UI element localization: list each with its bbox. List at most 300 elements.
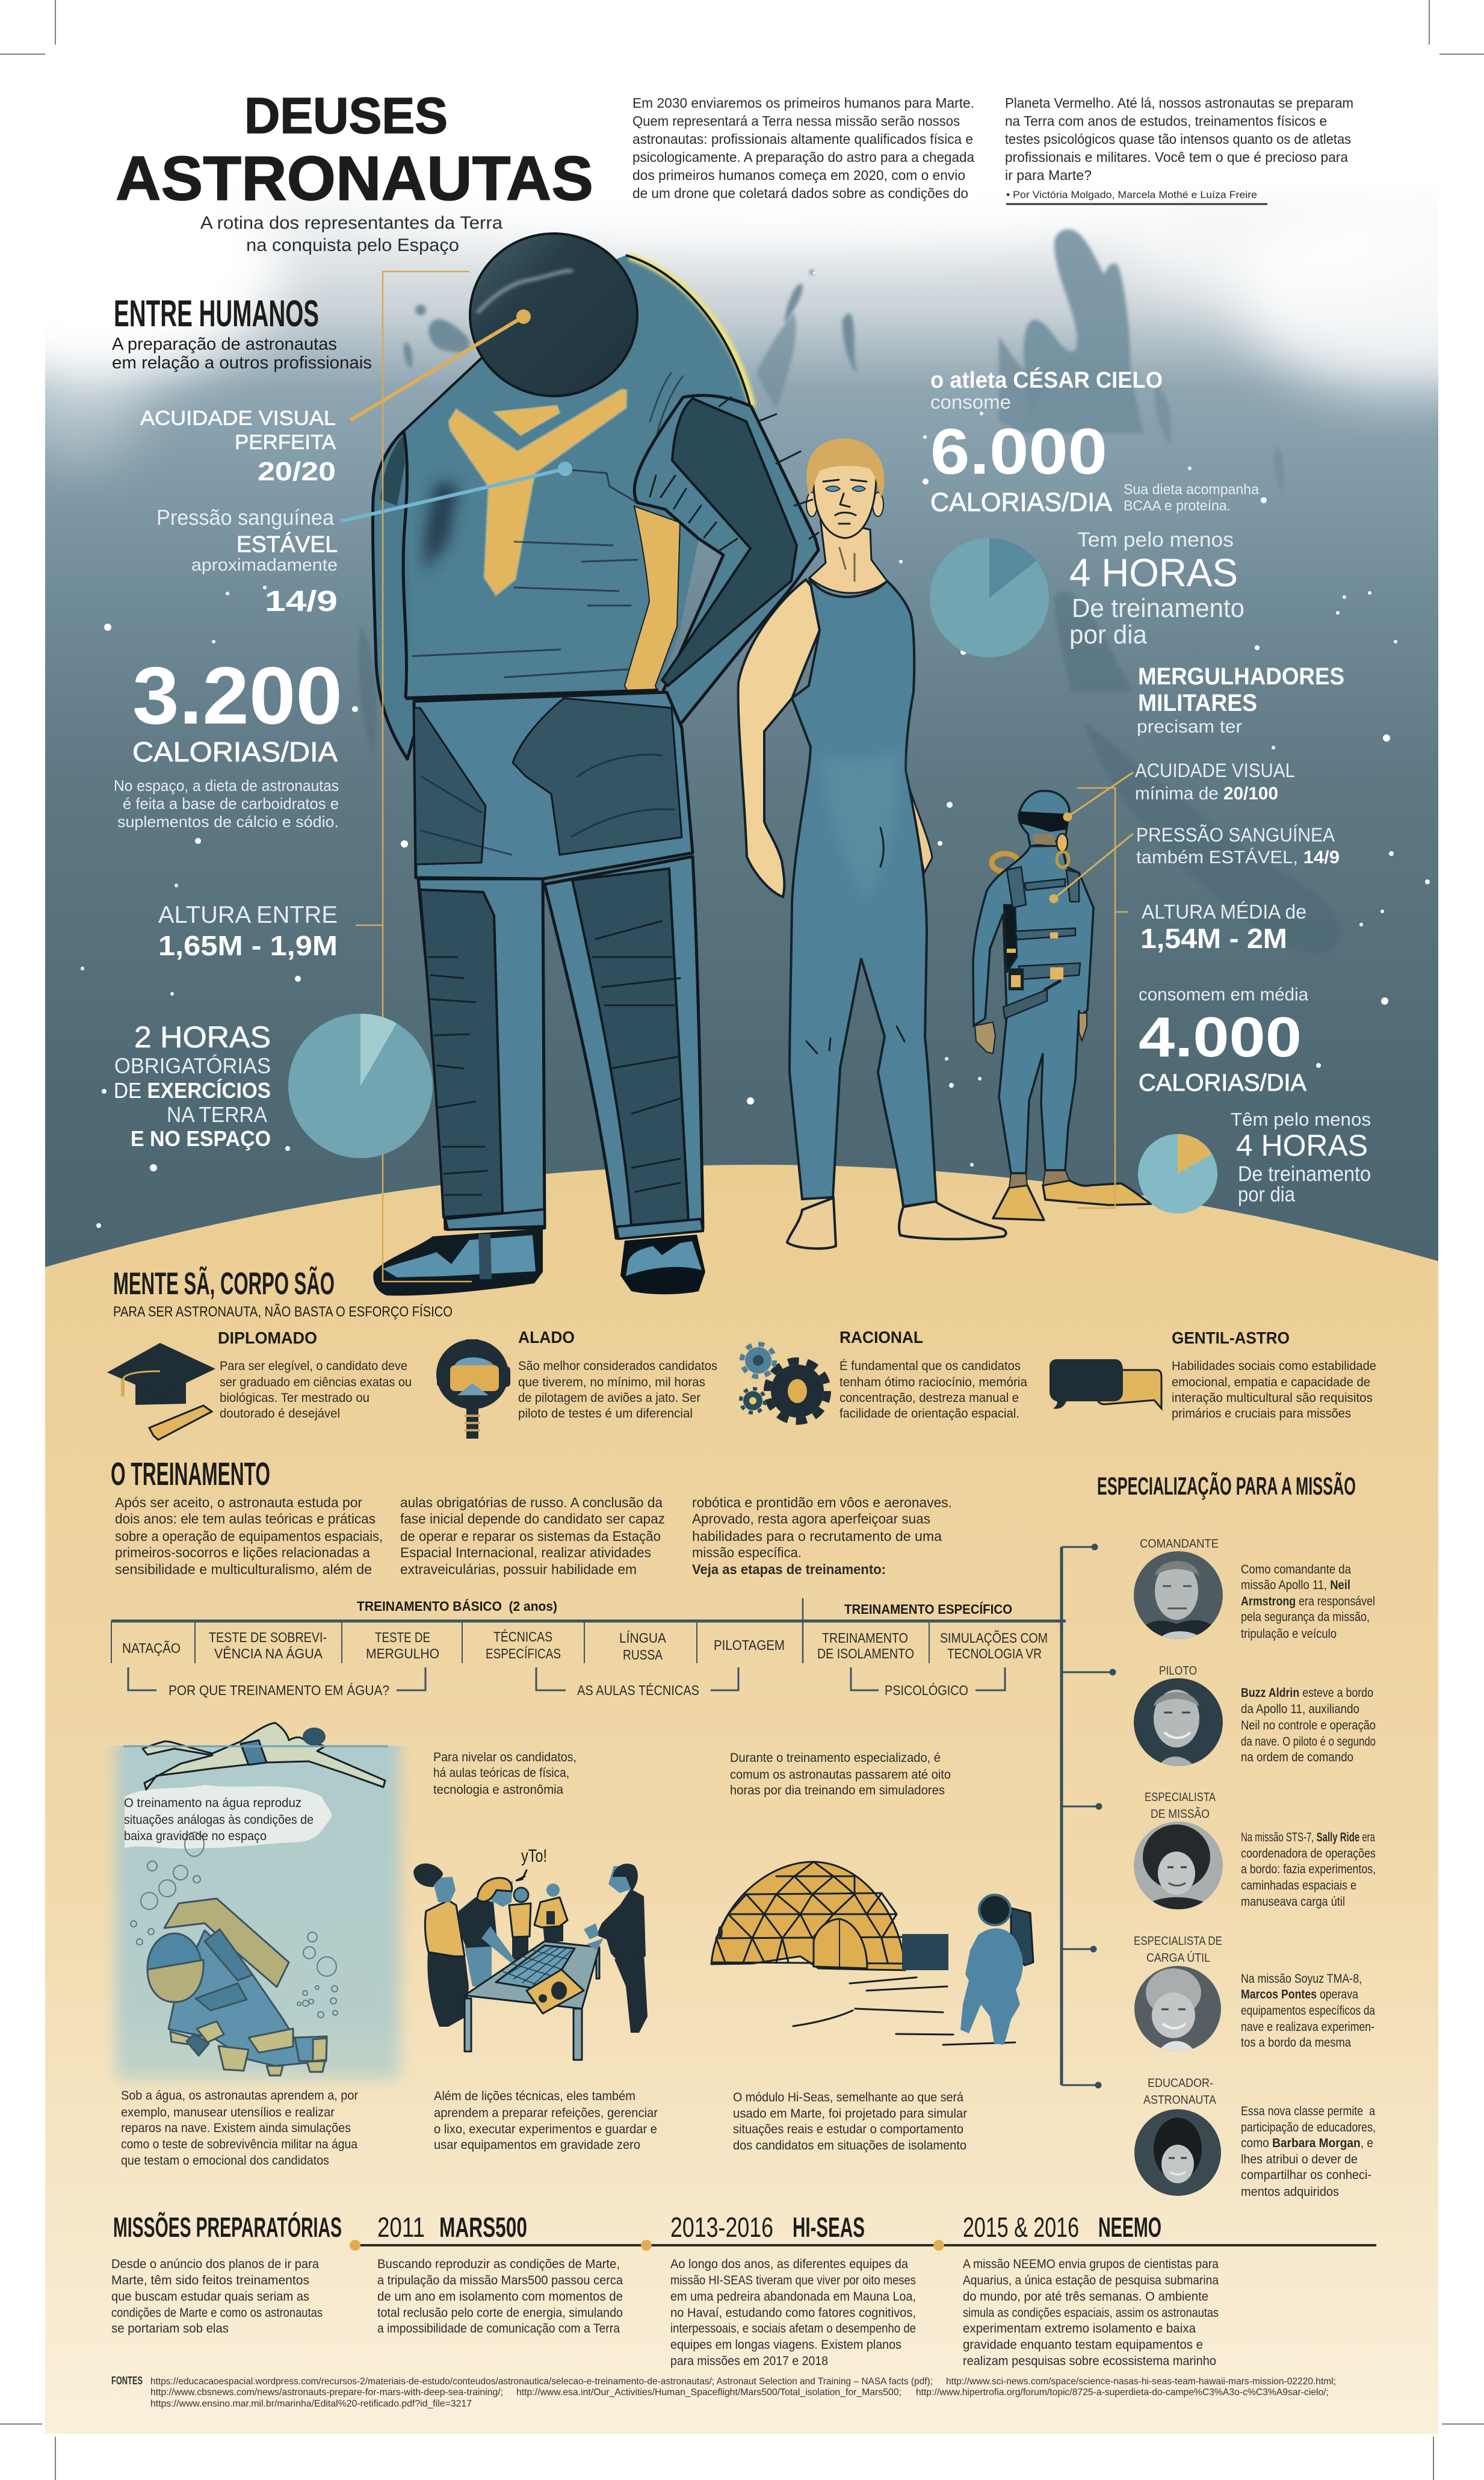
bios: Armstrong era responsável xyxy=(1241,1595,1375,1608)
near arm xyxy=(738,580,820,897)
bios: Neil no controle e operação xyxy=(1241,1719,1376,1732)
sources: http://www.esa.int/Our_Activities/Human_Spaceflight/Mars500/Total_isolation_for_Mars500; xyxy=(516,2387,901,2398)
stat: astronaut height: 1,65M - 1,9M xyxy=(158,930,338,961)
heading: missões preparatórias: MISSÕES PREPARATÓRIAS xyxy=(113,2212,342,2243)
illustration: Hi-Seas dome xyxy=(711,1862,1015,2045)
text: training intro: dois anos: ele tem aulas teóricas e práticas xyxy=(115,1511,376,1527)
bios: Marcos Pontes operava xyxy=(1241,1988,1358,2001)
text: bottom captions: Sob a água, os astronautas aprendem a, por xyxy=(121,2089,358,2103)
intro text xyxy=(632,95,1353,201)
block: racional: concentração, destreza manual e xyxy=(839,1391,1019,1405)
intro text: Planeta Vermelho. Até lá, nossos astronautas se preparam xyxy=(1005,95,1353,111)
sources: http://www.hipertrofia.org/forum/topic/8725-a-superdieta-do-campe%C3%A3o-c%C3%A9sar-cielo/; xyxy=(916,2387,1329,2398)
stat: divers: consomem em média xyxy=(1139,985,1308,1005)
stat: astronaut calories: é feita a base de carboidratos e xyxy=(123,795,339,813)
block: racional: facilidade de orientação espacial. xyxy=(839,1407,1019,1421)
block: diplomado: DIPLOMADO xyxy=(218,1328,317,1347)
stat: blood pressure: 14/9 xyxy=(265,586,338,618)
stat: blood pressure: aproximadamente xyxy=(191,556,338,575)
text: missions: a impossibilidade de comunicação com a Terra xyxy=(377,2322,620,2336)
title: DEUSES xyxy=(244,87,448,144)
bios: da Apollo 11, auxiliando xyxy=(1241,1702,1359,1716)
woman left xyxy=(413,1864,469,2027)
block: racional xyxy=(839,1328,1027,1421)
block: alado: São melhor considerados candidatos xyxy=(518,1359,717,1373)
byline: • Por Victória Molgado, Marcela Mothé e Luíza Freire xyxy=(1006,189,1257,200)
stat: divers: ACUIDADE VISUAL xyxy=(1135,760,1295,781)
illustration: Hi-Seas astronaut xyxy=(960,1895,1033,2045)
stat: divers: MERGULHADORES xyxy=(1138,663,1344,690)
heading: o treinamento: O TREINAMENTO xyxy=(111,1456,270,1492)
block: diplomado: biológicas. Ter mestrado ou xyxy=(220,1391,369,1405)
coil xyxy=(992,854,1018,872)
left leg xyxy=(418,879,545,1230)
text: training intro: de operar e reparar os sistemas da Estação xyxy=(400,1528,661,1544)
stat: divers: por dia xyxy=(1238,1183,1295,1206)
text: missions: que buscam estudar quais seriam as xyxy=(111,2290,309,2304)
timeline xyxy=(350,2240,1376,2251)
text: missions: experimentam extremo isolamento e baixa xyxy=(963,2322,1196,2336)
text: bottom captions: o lixo, executar experimentos e guardar e xyxy=(434,2122,657,2136)
text: training intro: missão específica. xyxy=(692,1545,802,1560)
stat: astronaut calories: suplementos de cálcio e sódio. xyxy=(117,813,339,831)
heading: entre humanos: A preparação de astronautas xyxy=(112,335,337,354)
text: training intro: sobre a operação de equipamentos espaciais, xyxy=(115,1528,383,1544)
heading: missões preparatórias: NEEMO xyxy=(1098,2212,1161,2243)
heading: mente sã, corpo são xyxy=(113,1266,453,1320)
illustration: classroom: yTo! xyxy=(521,1846,547,1866)
block: diplomado: doutorado é desejável xyxy=(220,1407,340,1421)
title: ASTRONAUTAS xyxy=(116,144,593,214)
intro text: Quem representará a Terra nessa missão serão nossos xyxy=(632,113,960,129)
heading: mente sã, corpo são: PARA SER ASTRONAUTA, NÃO BASTA O ESFORÇO FÍSICO xyxy=(113,1304,453,1320)
boots xyxy=(373,1229,705,1296)
stat: exercise hours: 2 HORAS xyxy=(134,1020,271,1054)
text: missions: total reclusão pelo corte de energia, simulando xyxy=(377,2306,623,2320)
text: bottom captions: usado em Marte, foi projetado para simular xyxy=(733,2107,967,2121)
sources: https://www.ensino.mar.mil.br/marinha/Edital%20-retificado.pdf?id_file=3217 xyxy=(150,2399,472,2409)
role labels: PILOTO xyxy=(1159,1664,1197,1678)
text: missions: Aquarius, a única estação de pesquisa submarina xyxy=(963,2274,1219,2287)
stat: divers: Têm pelo menos xyxy=(1231,1109,1371,1130)
text: training intro xyxy=(115,1495,952,1577)
heading: missões preparatórias: MARS500 xyxy=(439,2212,527,2243)
bios: Como comandante da xyxy=(1241,1563,1351,1576)
text: water training caption: situações análogas às condições de xyxy=(124,1813,314,1827)
text: bottom captions xyxy=(121,2089,967,2168)
text: missions: gravidade enquanto testam equipamentos e xyxy=(963,2338,1203,2352)
text: bottom captions: usar equipamentos em gravidade zero xyxy=(434,2138,640,2152)
text: water training caption xyxy=(124,1796,314,1843)
role labels: DE MISSÃO xyxy=(1151,1806,1210,1821)
role labels: CARGA ÚTIL xyxy=(1146,1951,1210,1965)
stat: exercise hours: DE EXERCÍCIOS xyxy=(114,1078,271,1103)
intro text: psicologicamente. A preparação do astro para a chegada xyxy=(632,149,974,165)
table xyxy=(465,1941,599,2060)
wrinkles xyxy=(413,470,637,677)
heading: missões preparatórias: HI-SEAS xyxy=(793,2212,865,2243)
sources xyxy=(111,2375,1336,2409)
role labels: ASTRONAUTA xyxy=(1143,2094,1217,2107)
bios: lhes atribui o dever de xyxy=(1241,2153,1358,2166)
stat: athlete: CALORIAS/DIA xyxy=(930,488,1113,517)
pelvis xyxy=(406,690,693,879)
bios: participação de educadores, xyxy=(1241,2121,1376,2134)
bios: coordenadora de operações xyxy=(1241,1847,1376,1861)
text: bottom captions: exemplo, manusear utensílios e realizar xyxy=(121,2106,335,2119)
heading: missões preparatórias: 2015 & 2016 xyxy=(963,2212,1079,2243)
smudge xyxy=(424,482,459,572)
sources: https://educacaoespacial.wordpress.com/recursos-2/materiais-de-estudo/conteudos/astronautica/selecao-e-treinamento-de-astronautas/; Astronaut Selection and Training – NASA facts (pdf); xyxy=(150,2376,933,2387)
bubbles xyxy=(131,1832,338,2018)
text: missions: para missões em 2017 e 2018 xyxy=(670,2354,828,2368)
intro text: de um drone que coletará dados sobre as condições do xyxy=(632,185,968,201)
title xyxy=(116,87,593,214)
stat: exercise hours: OBRIGATÓRIAS xyxy=(114,1053,271,1078)
text: missions: Buscando reproduzir as condições de Marte, xyxy=(377,2257,620,2271)
sources: FONTES xyxy=(111,2375,143,2387)
panel: sand ground xyxy=(45,1165,1438,2434)
training table xyxy=(111,1598,1066,1663)
training table: VÊNCIA NA ÁGUA xyxy=(214,1646,323,1661)
man right xyxy=(584,1864,648,2033)
intro text: dos primeiros humanos começa em 2020, com o envio xyxy=(632,167,965,183)
training table: TREINAMENTO BÁSICO (2 anos) xyxy=(357,1599,557,1614)
heading: missões preparatórias: 2013-2016 xyxy=(670,2212,773,2243)
arrow: visual acuity xyxy=(350,309,531,420)
portrait: Neil Armstrong xyxy=(1131,1550,1228,1640)
block: gentil-astro: primários e cruciais para missões xyxy=(1172,1407,1351,1421)
stat: divers xyxy=(1135,663,1371,1206)
text: bottom captions: que testam o emocional dos candidatos xyxy=(121,2154,329,2168)
stat: blood pressure: ESTÁVEL xyxy=(237,532,338,557)
text: water training caption: baixa gravidade no espaço xyxy=(124,1829,267,1843)
text: missions: Desde o anúncio dos planos de ir para xyxy=(111,2257,319,2271)
stat: athlete training: por dia xyxy=(1069,620,1147,649)
diver body xyxy=(973,846,1093,1173)
subtitle xyxy=(200,213,502,255)
portrait: Buzz Aldrin xyxy=(1131,1676,1228,1767)
portrait: Marcos Pontes xyxy=(1134,1966,1221,2051)
stat: divers: ALTURA MÉDIA de xyxy=(1142,901,1306,923)
bios: pela segurança da missão, xyxy=(1241,1610,1370,1624)
feet xyxy=(787,1198,836,1248)
icon: swimmer xyxy=(143,1723,385,1790)
training table: RUSSA xyxy=(623,1647,663,1663)
stat: divers: mínima de 20/100 xyxy=(1135,784,1278,804)
text: simulators caption: horas por dia treinando em simuladores xyxy=(730,1784,945,1797)
role labels: ESPECIALISTA xyxy=(1145,1791,1216,1804)
bios: missão Apollo 11, Neil xyxy=(1241,1578,1350,1592)
neck xyxy=(809,518,887,593)
text: bottom captions: como o teste de sobrevivência militar na água xyxy=(121,2137,357,2151)
intro text: astronautas: profissionais altamente qualificados física e xyxy=(632,131,973,147)
text: simulators caption: Durante o treinamento especializado, é xyxy=(730,1751,941,1765)
icon: gears xyxy=(741,1344,827,1421)
text: bottom captions: Além de lições técnicas, eles também xyxy=(434,2089,635,2103)
blonde person xyxy=(459,1878,522,1986)
icon: underwater astronaut xyxy=(147,1899,327,2075)
torso xyxy=(404,358,699,698)
block: diplomado: ser graduado em ciências exatas ou xyxy=(220,1375,412,1389)
illustration: athlete xyxy=(738,438,1006,1248)
bios: Na missão Soyuz TMA-8, xyxy=(1241,1972,1362,1986)
intro text: testes psicológicos quase tão intensos quanto os de atletas xyxy=(1005,131,1351,147)
intro text: na Terra com anos de estudos, treinamentos físicos e xyxy=(1005,113,1327,129)
training table: SIMULAÇÕES COM xyxy=(940,1629,1048,1646)
role labels: EDUCADOR- xyxy=(1148,2077,1213,2090)
training table: NATAÇÃO xyxy=(122,1640,181,1656)
block: racional: É fundamental que os candidatos xyxy=(839,1359,1021,1373)
text: missions: missão HI-SEAS tiveram que viver por oito meses xyxy=(670,2274,916,2287)
text: bottom captions: aprendem a preparar refeições, gerenciar xyxy=(434,2106,658,2120)
portrait: Sally Ride xyxy=(1131,1821,1228,1911)
text: simulators caption: comum os astronautas passarem até oito xyxy=(730,1768,951,1782)
tree connector xyxy=(1062,1544,1116,2088)
text: bottom captions: dos candidatos em situações de isolamento xyxy=(733,2139,966,2153)
text: simulators caption xyxy=(730,1751,951,1797)
icon: speech bubbles xyxy=(1050,1359,1161,1409)
training table: TESTE DE xyxy=(375,1629,430,1645)
block: diplomado xyxy=(218,1328,412,1421)
heading: entre humanos: em relação a outros profissionais xyxy=(112,353,372,373)
text: training intro: fase inicial depende do candidato ser capaz xyxy=(400,1511,665,1527)
portrait: Barbara Morgan xyxy=(1134,2109,1221,2196)
stat: athlete xyxy=(930,367,1260,517)
intro text: profissionais e militares. Você tem o que é precioso para xyxy=(1005,149,1348,165)
arrow: blood pressure xyxy=(341,462,572,521)
pie chart: astronaut exercise xyxy=(288,1014,433,1158)
heading: missões preparatórias: 2011 xyxy=(377,2212,425,2243)
text: missions: Ao longo dos anos, as diferentes equipes da xyxy=(670,2257,908,2271)
training table: ESPECÍFICAS xyxy=(486,1646,561,1661)
role labels xyxy=(1134,1537,1222,2107)
stat: athlete training xyxy=(1069,529,1244,649)
bios: tos a bordo da mesma xyxy=(1241,2036,1351,2050)
yellow side strip xyxy=(625,506,680,734)
block: racional: RACIONAL xyxy=(839,1328,923,1347)
stat: athlete training: Tem pelo menos xyxy=(1077,529,1234,551)
far arm xyxy=(906,777,932,873)
stat: divers: 1,54M - 2M xyxy=(1140,923,1287,954)
subtitle: A rotina dos representantes da Terra xyxy=(200,213,502,233)
icon: pilot helmet xyxy=(436,1339,510,1439)
text: missions: do mundo, por até três semanas. O ambiente xyxy=(963,2290,1208,2304)
panel: water training xyxy=(116,1723,400,2080)
stat: divers: De treinamento xyxy=(1238,1162,1371,1186)
role labels: COMANDANTE xyxy=(1140,1537,1219,1551)
icon: graduation cap and diploma xyxy=(107,1343,215,1440)
stat: athlete: o atleta CÉSAR CIELO xyxy=(930,367,1163,393)
text: missions: em uma pedreira abandonada em Mauna Loa, xyxy=(670,2290,916,2304)
bios: Na missão STS-7, Sally Ride era xyxy=(1241,1831,1375,1844)
training table: TÉCNICAS xyxy=(493,1629,552,1645)
sources: http://www.cbsnews.com/news/astronauts-prepare-for-mars-with-deep-sea-training/; xyxy=(150,2387,503,2398)
right leg xyxy=(545,857,703,1239)
bios: Essa nova classe permite a xyxy=(1241,2104,1375,2118)
text: training intro: Aprovado, resta agora aperfeiçoar suas xyxy=(692,1511,930,1527)
bios: mentos adquiridos xyxy=(1241,2185,1339,2199)
stat: visual acuity xyxy=(140,407,336,486)
text: bottom captions: situações reais e estudar o comportamento xyxy=(733,2122,963,2136)
heading: mente sã, corpo são: MENTE SÃ, CORPO SÃO xyxy=(113,1266,335,1301)
brackets with sub-labels xyxy=(128,1667,1005,1698)
text: training intro: habilidades para o recrutamento de uma xyxy=(692,1528,942,1544)
head xyxy=(806,438,885,538)
stat: astronaut height xyxy=(158,902,338,961)
bios: nave e realizava experimen- xyxy=(1241,2020,1374,2034)
sources: http://www.sci-news.com/space/science-nasas-hi-seas-team-hawaii-mars-mission-02220.html; xyxy=(946,2376,1336,2387)
bios: equipamentos específicos da xyxy=(1241,2004,1375,2018)
text: missions xyxy=(111,2257,1219,2368)
stars xyxy=(81,271,1430,1228)
bios: Buzz Aldrin esteve a bordo xyxy=(1241,1686,1373,1700)
illustration: classroom xyxy=(413,1846,648,2060)
text: missions: condições de Marte e como os astronautas xyxy=(111,2306,323,2320)
bios xyxy=(1241,1563,1376,2199)
bios: como Barbara Morgan, e xyxy=(1241,2136,1373,2150)
text: missions: a tripulação da missão Mars500 passou cerca xyxy=(377,2274,623,2287)
brackets with sub-labels: AS AULAS TÉCNICAS xyxy=(577,1682,699,1698)
training table: TECNOLOGIA VR xyxy=(947,1646,1042,1661)
stat: astronaut calories: No espaço, a dieta de astronautas xyxy=(114,777,339,795)
subtitle: na conquista pelo Espaço xyxy=(246,235,459,255)
text: lessons caption: Para nivelar os candidatos, xyxy=(433,1750,577,1764)
stat: divers: 4 HORAS xyxy=(1236,1129,1368,1162)
text: training intro: Veja as etapas de treinamento: xyxy=(692,1561,886,1577)
bios: a bordo: fazia experimentos, xyxy=(1241,1862,1376,1876)
stat: exercise hours xyxy=(114,1020,271,1151)
bios: da nave. O piloto é o segundo xyxy=(1241,1735,1376,1749)
stat: divers: precisam ter xyxy=(1137,717,1242,737)
text: lessons caption xyxy=(433,1750,577,1797)
text: missions: no Havaí, estudando como fatores cognitivos, xyxy=(670,2306,916,2320)
bios: tripulação e veículo xyxy=(1241,1627,1337,1641)
text: training intro: robótica e prontidão em vôos e aeronaves. xyxy=(692,1495,952,1510)
training table: TREINAMENTO ESPECÍFICO xyxy=(844,1602,1012,1617)
brackets with sub-labels: POR QUE TREINAMENTO EM ÁGUA? xyxy=(168,1682,389,1698)
block: gentil-astro: interação multicultural são requisitos xyxy=(1172,1391,1373,1405)
text: training intro: sensibilidade e multiculturalismo, além de xyxy=(115,1561,372,1577)
text: missions: realizam pesquisas sobre ecossistema marinho xyxy=(963,2354,1216,2368)
hands xyxy=(975,1013,1087,1053)
stat: athlete: BCAA e proteína. xyxy=(1124,498,1231,514)
stat: visual acuity: PERFEITA xyxy=(235,431,336,454)
stat: divers: também ESTÁVEL, 14/9 xyxy=(1136,848,1340,867)
stat: athlete: 6.000 xyxy=(930,415,1107,488)
stat: divers: PRESSÃO SANGUÍNEA xyxy=(1136,824,1335,846)
text: missions: equipes em longas viagens. Existem planos xyxy=(670,2338,901,2352)
hood xyxy=(602,255,752,457)
training table: DE ISOLAMENTO xyxy=(817,1646,914,1661)
stat: visual acuity: 20/20 xyxy=(258,457,336,486)
text: missions: simula as condições espaciais, assim os astronautas xyxy=(963,2306,1219,2320)
block: alado: de pilotagem de aviões a jato. Ser xyxy=(518,1391,700,1405)
block: alado: que tiverem, no mínimo, mil horas xyxy=(518,1375,705,1389)
bracket: diver height xyxy=(1077,788,1128,1208)
text: missions: A missão NEEMO envia grupos de cientistas para xyxy=(963,2257,1219,2271)
pie chart: diver training xyxy=(1138,1134,1217,1214)
text: lessons caption: há aulas teóricas de física, xyxy=(433,1766,569,1780)
training table: MERGULHO xyxy=(366,1646,439,1661)
text: bottom captions: O módulo Hi-Seas, semelhante ao que será xyxy=(733,2091,963,2104)
block: alado: piloto de testes é um diferencial xyxy=(518,1407,693,1421)
training table: TREINAMENTO xyxy=(822,1630,908,1646)
stat: divers: CALORIAS/DIA xyxy=(1139,1070,1306,1096)
diver head xyxy=(1019,791,1069,867)
role labels: ESPECIALISTA DE xyxy=(1134,1935,1222,1948)
heading: missões preparatórias xyxy=(113,2212,1161,2243)
block: gentil-astro xyxy=(1172,1328,1376,1421)
stat: exercise hours: E NO ESPAÇO xyxy=(131,1126,271,1151)
block: alado: ALADO xyxy=(518,1328,575,1347)
block: diplomado: Para ser elegível, o candidato deve xyxy=(220,1359,407,1373)
block: gentil-astro: Habilidades sociais como estabilidade xyxy=(1172,1359,1376,1373)
stat: astronaut height: ALTURA ENTRE xyxy=(158,902,338,928)
bracket: main astronaut height xyxy=(356,271,472,1282)
text: missions: Marte, têm sido feitos treinamentos xyxy=(111,2274,309,2287)
intro text: Em 2030 enviaremos os primeiros humanos para Marte. xyxy=(632,95,974,111)
brackets with sub-labels: PSICOLÓGICO xyxy=(885,1682,968,1698)
emblem Y xyxy=(448,389,627,596)
block: racional: tenham ótimo raciocínio, memória xyxy=(839,1375,1027,1389)
suit xyxy=(790,578,936,1206)
text: missions: se portariam sob elas xyxy=(111,2322,229,2336)
text: missions: interpessoais, e sociais afetam o desempenho de xyxy=(670,2322,916,2336)
block: gentil-astro: emocional, empatia e capacidade de xyxy=(1172,1375,1370,1389)
block: gentil-astro: GENTIL-ASTRO xyxy=(1172,1328,1290,1347)
training table: LÍNGUA xyxy=(619,1630,667,1646)
arrow: diver vision xyxy=(1064,772,1133,820)
stat: divers: 4.000 xyxy=(1139,1005,1302,1068)
illustration: big astronaut xyxy=(373,234,818,1296)
heading: entre humanos xyxy=(112,293,372,373)
text: training intro: extraveiculárias, possuir habilidade em xyxy=(400,1561,637,1577)
right arm xyxy=(634,373,818,737)
stat: athlete training: De treinamento xyxy=(1072,594,1244,623)
text: training intro: Espacial Internacional, realizar atividades xyxy=(400,1545,651,1560)
stat: divers: MILITARES xyxy=(1138,690,1257,716)
stat: blood pressure xyxy=(156,505,338,618)
cloud behind text xyxy=(125,1785,332,1849)
fins xyxy=(993,1170,1151,1220)
text: water training caption: O treinamento na água reproduz xyxy=(124,1796,301,1810)
straps and belts xyxy=(1003,867,1080,1018)
text: bottom captions: reparos na nave. Existem ainda simulações xyxy=(121,2121,351,2135)
text: training intro: Após ser aceito, o astronauta estuda por xyxy=(115,1495,362,1510)
panel: space background xyxy=(0,0,1484,1294)
stat: astronaut calories: 3.200 xyxy=(132,650,342,741)
bios: compartilhar os conheci- xyxy=(1241,2168,1371,2182)
visor xyxy=(470,234,637,396)
stat: astronaut calories xyxy=(114,650,342,831)
training table: TESTE DE SOBREVI- xyxy=(209,1629,327,1645)
block: alado xyxy=(518,1328,717,1421)
stat: athlete: consome xyxy=(930,391,1011,413)
text: training intro: primeiros-socorros e lições relacionadas a xyxy=(115,1545,370,1560)
text: training intro: aulas obrigatórias de russo. A conclusão da xyxy=(400,1495,663,1510)
intro text: ir para Marte? xyxy=(1005,167,1092,183)
bios: na ordem de comando xyxy=(1241,1750,1353,1764)
bios: manuseava carga útil xyxy=(1241,1895,1345,1909)
heading: entre humanos: ENTRE HUMANOS xyxy=(114,293,319,335)
text: lessons caption: tecnologia e astronômia xyxy=(433,1783,563,1797)
arrow: diver pressure xyxy=(1050,834,1133,902)
stat: astronaut calories: CALORIAS/DIA xyxy=(132,736,338,767)
text: missions: de um ano em isolamento com momentos de xyxy=(377,2290,623,2304)
stat: exercise hours: NA TERRA xyxy=(167,1102,267,1127)
training table: PILOTAGEM xyxy=(714,1637,785,1653)
